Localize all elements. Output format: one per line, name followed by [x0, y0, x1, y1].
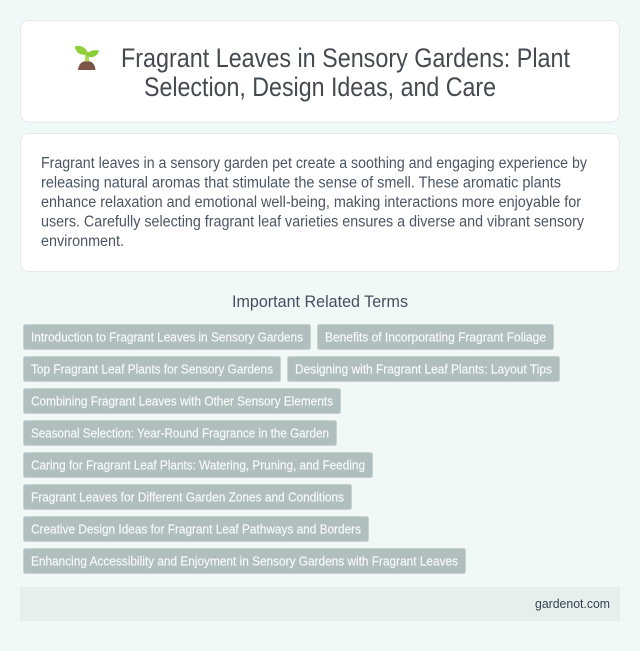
tag: Designing with Fragrant Leaf Plants: Layout Tips	[295, 362, 552, 376]
title: Fragrant Leaves in Sensory Gardens: Plant	[121, 43, 571, 73]
icon: seedling	[75, 46, 99, 70]
tag: Enhancing Accessibility and Enjoyment in Sensory Gardens with Fragrant Leaves	[31, 554, 458, 568]
title: Selection, Design Ideas, and Care	[144, 72, 496, 102]
tag: Combining Fragrant Leaves with Other Sensory Elements	[31, 394, 333, 408]
tag: Top Fragrant Leaf Plants for Sensory Gardens	[31, 362, 273, 376]
tag: Benefits of Incorporating Fragrant Foliage	[325, 330, 546, 344]
tag	[24, 356, 280, 382]
tag: Fragrant Leaves for Different Garden Zones and Conditions	[31, 490, 344, 504]
text block: summary: Fragrant leaves in a sensory garden pet create a soothing and engaging experience by	[41, 155, 587, 172]
tag	[24, 388, 340, 414]
text block: summary: users. Carefully selecting fragrant leaf varieties ensures a diverse and vibrant sensory	[41, 214, 584, 230]
tag	[24, 420, 336, 446]
title	[121, 43, 571, 102]
tag: Introduction to Fragrant Leaves in Sensory Gardens	[31, 330, 303, 344]
heading: related terms: Important Related Terms	[232, 293, 408, 311]
tag	[288, 356, 560, 382]
tag: Caring for Fragrant Leaf Plants: Watering, Pruning, and Feeding	[31, 458, 365, 472]
tag: Seasonal Selection: Year-Round Fragrance in the Garden	[31, 426, 329, 440]
footer: gardenot.com	[535, 596, 610, 611]
tag	[24, 484, 352, 510]
panel: title card	[20, 20, 620, 122]
text block: summary: enhance relaxation and emotional well-being, making interactions more enjoyable for	[41, 194, 581, 211]
tag	[24, 516, 368, 542]
footer	[20, 587, 620, 621]
tag	[24, 324, 310, 350]
panel: summary text	[20, 134, 620, 272]
text block: summary: environment.	[41, 233, 124, 250]
text block: summary: releasing natural aromas that stimulate the sense of smell. These aromatic plants	[41, 174, 561, 192]
text block: summary	[41, 155, 587, 250]
tag	[318, 324, 554, 350]
tag: Creative Design Ideas for Fragrant Leaf Pathways and Borders	[31, 522, 361, 536]
tag list: related terms	[24, 324, 560, 574]
tag	[24, 548, 466, 574]
tag	[24, 452, 372, 478]
